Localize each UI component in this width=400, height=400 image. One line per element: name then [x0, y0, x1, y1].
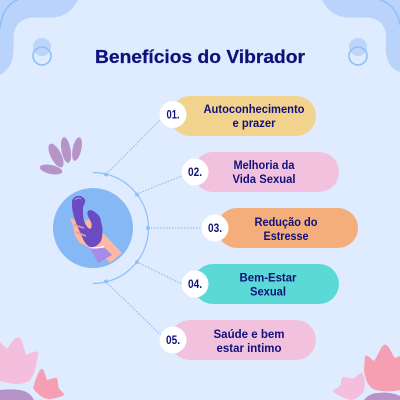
- right ring ornament: [349, 38, 367, 65]
- illustration: hand holding vibrator: [53, 188, 133, 268]
- top-right corner shape: [322, 0, 400, 72]
- item 01: [160, 96, 316, 136]
- item 05: Saúde e bem: [214, 329, 284, 341]
- bottom-right flowers: [333, 344, 400, 400]
- item 02: 02.: [188, 165, 202, 179]
- item 02: Melhoria da: [234, 160, 295, 172]
- item 05: estar intimo: [216, 343, 282, 355]
- item 03: Redução do: [254, 217, 318, 229]
- left ring ornament: [33, 38, 51, 65]
- item 03: [202, 208, 358, 248]
- top-left corner shape: [0, 0, 78, 75]
- icon: purple petals: [39, 136, 84, 176]
- item 02: [182, 152, 339, 192]
- item 05: 05.: [166, 333, 180, 347]
- item 03: Estresse: [264, 231, 308, 243]
- item 01: Autoconhecimento: [204, 104, 304, 116]
- item 03: 03.: [208, 221, 222, 235]
- item 01: 01.: [166, 108, 180, 122]
- bottom-left flowers: [0, 337, 64, 400]
- item 04: 04.: [188, 277, 202, 291]
- item 02: Vida Sexual: [232, 174, 296, 186]
- item 01: e prazer: [232, 118, 276, 130]
- item 04: Bem-Estar: [240, 272, 297, 284]
- title: Benefícios do Vibrador: [95, 46, 305, 67]
- item 05: [160, 320, 316, 360]
- connector arc with dots: [93, 118, 203, 336]
- item 04: [182, 264, 339, 304]
- item 04: Sexual: [250, 286, 286, 298]
